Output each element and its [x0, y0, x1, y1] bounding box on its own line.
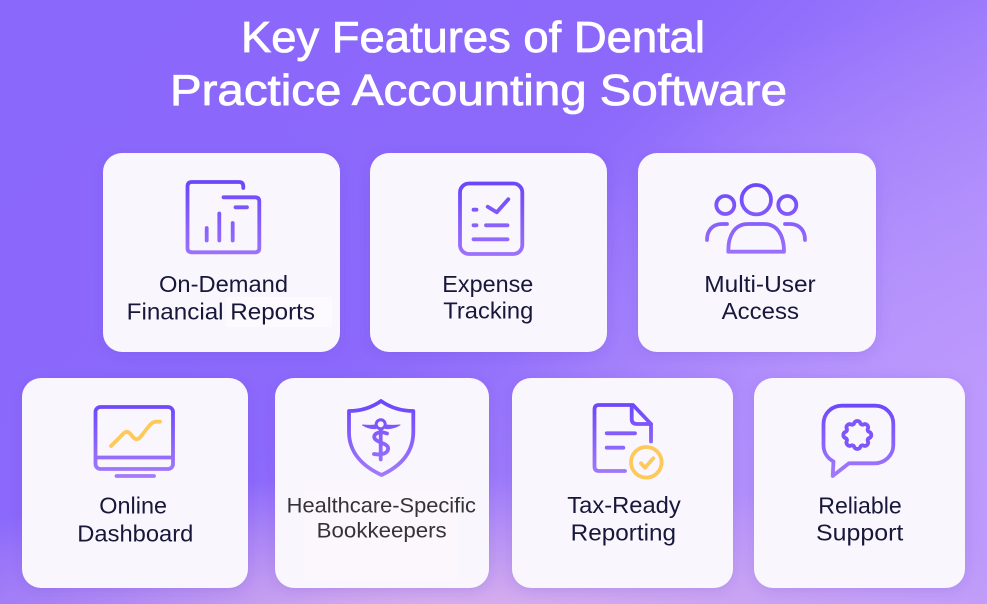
title	[170, 13, 787, 115]
label: reliable support: Support	[816, 520, 904, 546]
panel: reliable support	[754, 378, 965, 588]
label: expense tracking: Tracking	[443, 298, 533, 324]
label: multi-user access: Multi-User	[704, 271, 816, 297]
label: tax-ready reporting	[567, 492, 681, 546]
panel: online dashboard	[22, 378, 248, 588]
label: healthcare-specific bookkeepers	[287, 494, 476, 542]
label: tax-ready reporting: Reporting	[571, 520, 676, 546]
label: online dashboard: Online	[99, 492, 167, 518]
title: Practice Accounting Software	[170, 66, 787, 115]
panel: tax-ready reporting	[512, 378, 733, 588]
icon: report folder with bars	[188, 182, 259, 252]
icon: speech bubble with gear	[824, 406, 893, 476]
panel: on-demand financial reports	[103, 153, 340, 352]
icon: monitor with trend line	[96, 407, 173, 476]
icon: shield with caduceus	[349, 401, 413, 475]
label: expense tracking	[442, 271, 533, 324]
label: healthcare-specific bookkeepers: Bookkeepers	[317, 520, 447, 542]
icon: checklist	[460, 184, 522, 254]
label: on-demand financial reports: Financial Reports	[127, 298, 315, 324]
panel: multi-user access	[638, 153, 876, 352]
panel: healthcare-specific bookkeepers	[275, 378, 489, 588]
label: online dashboard: Dashboard	[77, 520, 193, 546]
label: healthcare-specific bookkeepers: Healthcare-Specific	[287, 494, 476, 518]
label: expense tracking: Expense	[442, 271, 533, 297]
label: multi-user access	[704, 271, 816, 324]
icon: three users	[707, 185, 805, 252]
panel: expense tracking	[370, 153, 607, 352]
label: on-demand financial reports	[127, 271, 332, 327]
label: on-demand financial reports: On-Demand	[159, 271, 288, 297]
icon: document with check badge	[594, 405, 662, 478]
label: online dashboard	[77, 492, 193, 546]
label: tax-ready reporting: Tax-Ready	[567, 492, 681, 518]
label: reliable support	[816, 492, 904, 546]
title: Key Features of Dental	[241, 13, 705, 62]
label: multi-user access: Access	[722, 298, 799, 324]
label: reliable support: Reliable	[818, 492, 902, 518]
